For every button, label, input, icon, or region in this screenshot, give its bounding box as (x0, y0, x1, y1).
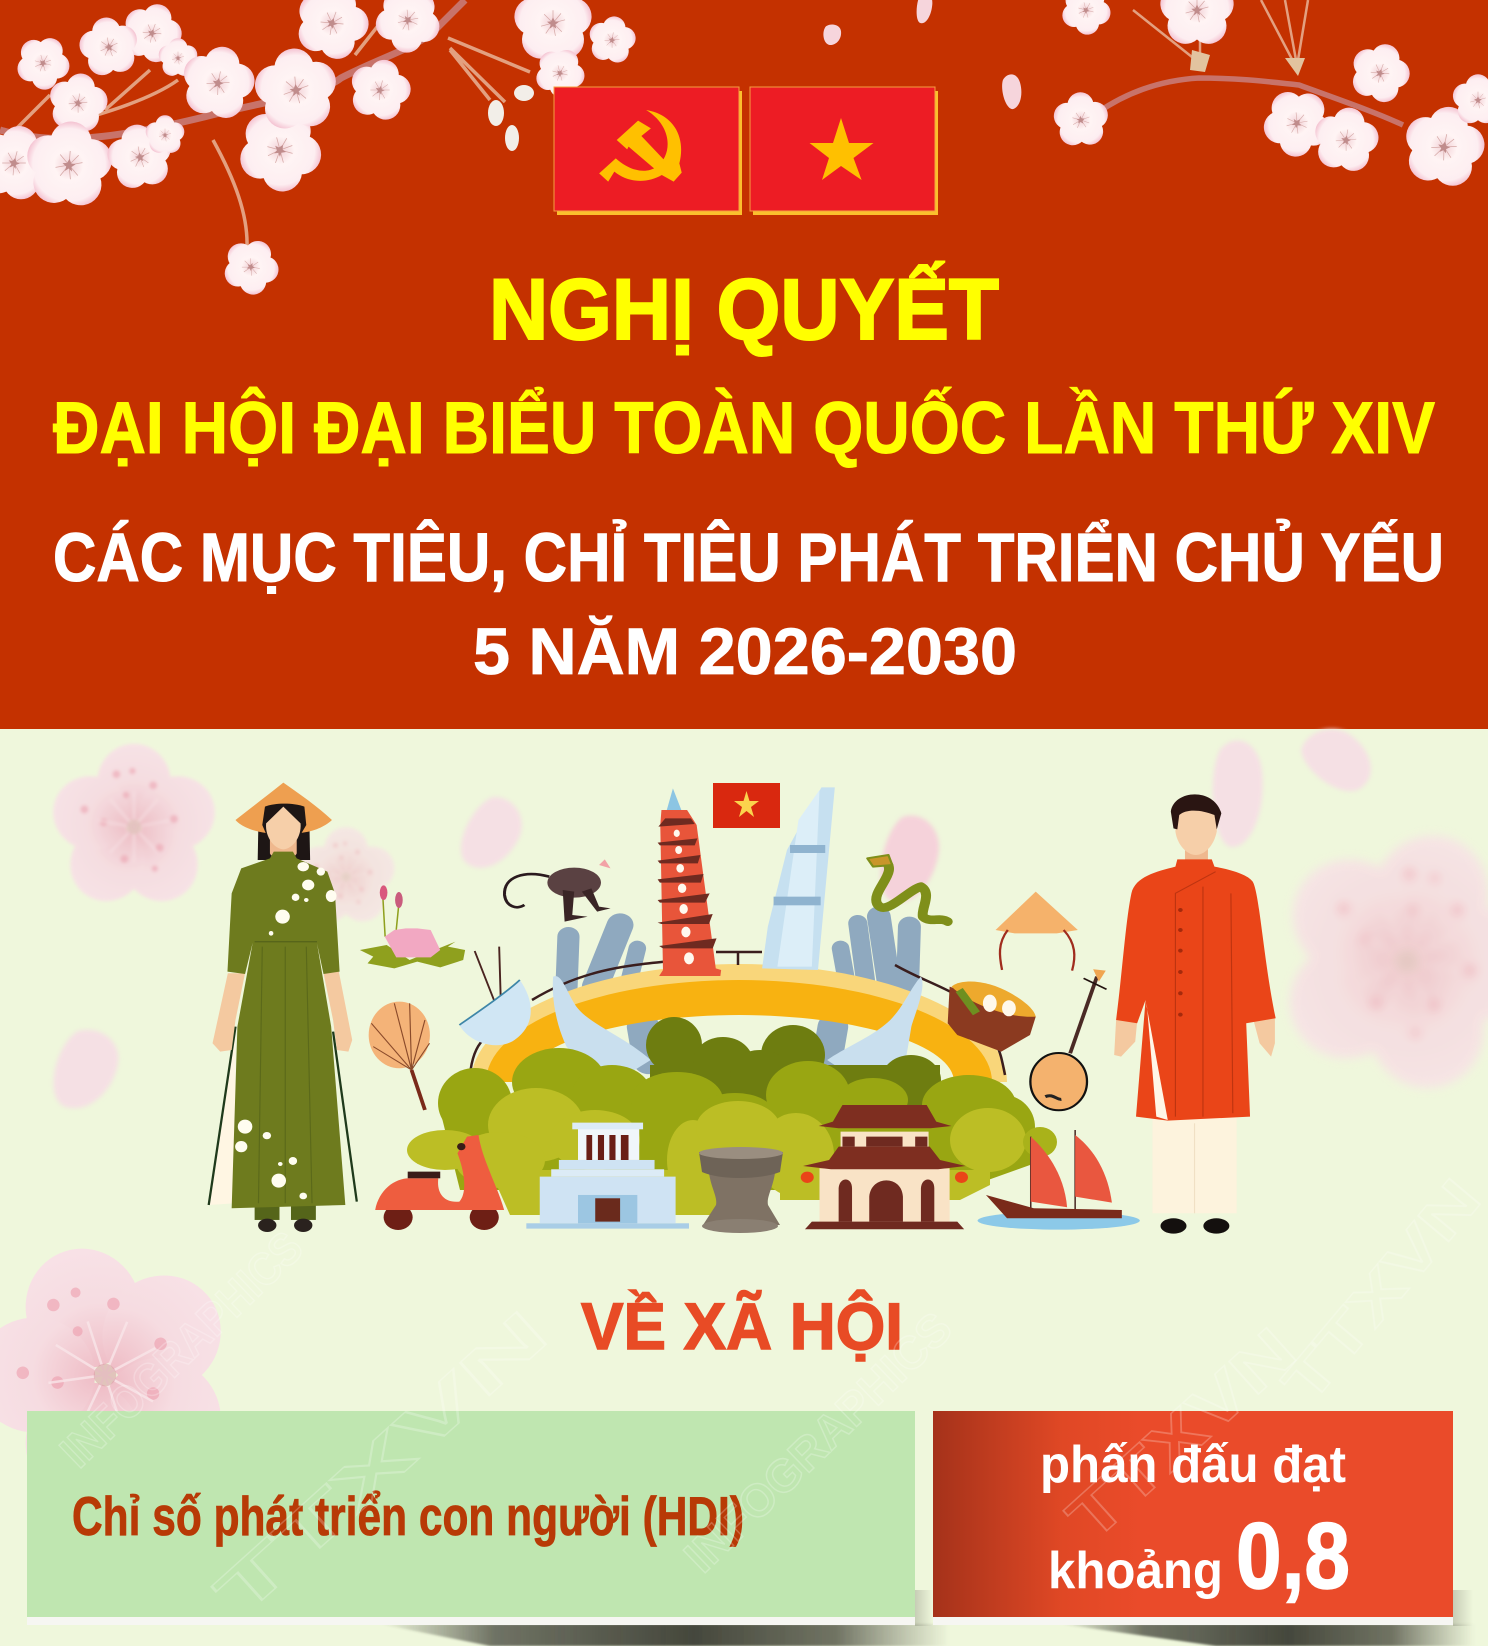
tower: pagoda (658, 788, 721, 976)
blossom branch top left (0, 0, 642, 302)
title: nghị quyết: NGHỊ QUYẾT (489, 262, 999, 358)
section heading: VỀ XÃ HỘI (581, 1289, 903, 1363)
watermark: INFOGRAPHICS (674, 1302, 962, 1582)
heading: period: 5 NĂM 2026-2030 (473, 614, 1017, 688)
gray hand left (567, 925, 649, 1060)
arched bridge (470, 952, 1007, 1082)
national flag (750, 87, 938, 215)
temple (801, 1105, 968, 1229)
man in red ao dai (1114, 794, 1276, 1234)
woman in ao dai (209, 783, 357, 1232)
illustration: vietnam culture (209, 783, 1276, 1234)
trees (407, 1017, 1057, 1215)
noodle basket (948, 982, 1036, 1052)
target text line two (1048, 1503, 1350, 1608)
label text: Chỉ số phát triển con người (HDI) (72, 1485, 744, 1547)
dark trees (646, 1017, 941, 1155)
gray hand right (827, 917, 909, 1060)
mausoleum (526, 1123, 689, 1229)
right group of objects (801, 794, 1276, 1234)
bronze drum (699, 1147, 783, 1233)
panel: hdi label (27, 1411, 915, 1625)
left group of objects (209, 783, 689, 1232)
mid trees (438, 1048, 1035, 1190)
party flag (554, 87, 742, 215)
target text line two: khoảng (1048, 1542, 1223, 1600)
header panel (0, 0, 1488, 729)
target text line one: phấn đấu đạt (1040, 1436, 1346, 1494)
moon lute (1030, 969, 1107, 1110)
icon: hammer and sickle (599, 110, 682, 182)
blossom branch top right (823, 0, 1488, 199)
monkey (504, 859, 611, 922)
light hands (553, 976, 922, 1087)
falling petals (823, 0, 1025, 111)
watermark: INFOGRAPHICS (50, 1221, 313, 1477)
icon: star (810, 118, 874, 180)
background blossoms (0, 720, 1488, 1551)
tower: skyscraper (762, 787, 835, 970)
conical hat (996, 892, 1078, 971)
watermark (50, 1167, 1488, 1630)
lotus (360, 885, 465, 968)
watermark: TTXVN (1270, 1167, 1488, 1415)
scooter (375, 1135, 504, 1230)
panel shadows (380, 1590, 1475, 1646)
boat (978, 1130, 1140, 1230)
light trees (407, 1088, 1057, 1215)
panel: hdi value (933, 1411, 1453, 1625)
hand fan (369, 1002, 430, 1110)
dragon (867, 855, 948, 922)
small flag (713, 783, 780, 828)
target text line two: 0,8 (1236, 1503, 1350, 1608)
watermark: TTXVN (201, 1296, 561, 1630)
watermark: TTXVN (1053, 1314, 1309, 1554)
noodle bowl with chopsticks (459, 947, 531, 1045)
